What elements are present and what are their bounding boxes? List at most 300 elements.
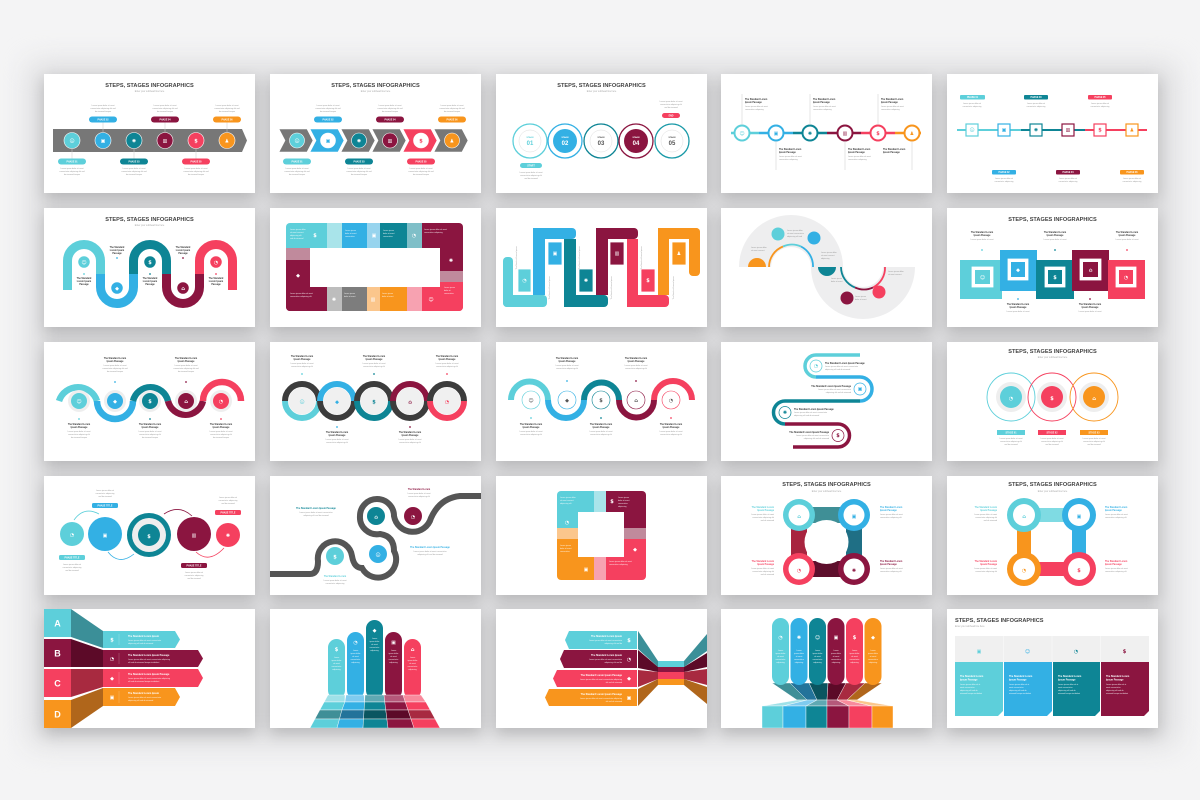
slide 20: four linked circles squared: The Standard Lorem	[1105, 560, 1127, 563]
slide 23: arrows converging: adipiscing elit sed do	[604, 642, 622, 645]
slide 19: four linked circles: Ipsum Passage	[757, 564, 775, 566]
slide 11: wave with circles: Lorem ipsum dolor sit amet	[104, 364, 127, 367]
slide 3: stage circles: STAGE	[632, 136, 640, 139]
slide 14: snake line: Lorem ipsum dolor sit amet consectetur	[794, 411, 827, 414]
slide 11: wave with circles	[44, 342, 255, 461]
slide 3: stage circles	[496, 74, 707, 193]
slide 16: phase circles with arrows: Lorem ipsum dolor sit	[63, 563, 82, 566]
slide 25: four column cards: Enter your subhead line here	[955, 625, 985, 628]
slide 19: four linked circles: Lorem ipsum dolor sit amet	[880, 513, 903, 516]
slide 21: ABCD ribbons: C	[54, 678, 61, 688]
slide 18: square tile frame: Lorem ipsum dolor sit amet	[609, 560, 632, 563]
slide 13: wave with outline circles: Ipsum Passage	[523, 427, 540, 429]
slide 18: square tile frame: adipiscing	[618, 506, 626, 508]
slide 8: serpentine bars: ◔	[522, 278, 527, 284]
slide 19: four linked circles: sed do eiusmod	[761, 574, 774, 576]
slide 20: four linked circles squared: consectetur adipiscing elit	[975, 570, 997, 573]
slide 1: phase arrow band: Lorem ipsum dolor sit amet	[154, 104, 177, 107]
slide 25: four column cards: $	[1123, 649, 1127, 655]
slide 22: pillars with stairs: Lorem	[334, 656, 340, 659]
slide 12: ring chain: The Standard Lorem	[399, 431, 421, 434]
slide 23: arrows converging: Lorem ipsum dolor sit amet consectetur	[589, 658, 622, 661]
slide 2: chevron phases: do eiusmod tempor	[351, 173, 367, 176]
slide 2: chevron phases: ☺	[294, 137, 300, 144]
slide 6: wave arches: ⌂	[181, 286, 185, 292]
slide 5: square phases: PHASE 01	[967, 96, 979, 99]
slide 3: stage circles: STAGE	[597, 136, 605, 139]
slide 22: pillars with stairs: ipsum dolor	[351, 652, 361, 655]
slide 25: four column cards: Lorem ipsum dolor sit at	[1106, 683, 1127, 686]
slide 23: arrows converging: The Standard Lorem Ipsum	[591, 654, 622, 657]
slide 23: arrows converging: $	[627, 638, 631, 644]
slide 5: square phases: PHASE 02	[998, 171, 1010, 174]
slide 24: six pillars funnel: consectetur	[813, 658, 823, 661]
slide 7: tile frame: ✺	[449, 258, 453, 264]
slide 10: stepped frames: Lorem ipsum dolor sit amet	[971, 238, 994, 241]
slide 2: chevron phases: STEPS, STAGES INFOGRAPHICS	[331, 83, 420, 89]
slide 6: wave arches	[44, 208, 255, 327]
slide 12: ring chain: Lorem ipsum dolor sit amet	[291, 362, 314, 365]
slide 5: square phases: Lorem ipsum dolor sit	[995, 177, 1014, 180]
slide 25: four column cards: eiusmod tempor incididunt	[1058, 692, 1081, 695]
slide 1: phase arrow band: Lorem ipsum dolor sit amet	[123, 167, 146, 170]
slide 24: six pillars funnel: consectetur	[831, 658, 841, 661]
slide 6: wave arches: The Standard	[143, 277, 158, 280]
slide 4: timeline circles: Ipsum Passage	[848, 152, 865, 154]
slide 12: ring chain: The Standard Lorem	[436, 355, 458, 358]
slide 6: wave arches: $	[148, 260, 152, 266]
slide 8: serpentine bars: ✺	[584, 278, 588, 284]
slide 24: six pillars funnel: ipsum dolor	[794, 652, 804, 655]
slide 4: timeline circles: The Standard Lorem	[745, 98, 767, 101]
slide 7: tile frame: sed do eiusmod	[290, 238, 303, 240]
slide 5: square phases: ✺	[1034, 128, 1038, 134]
slide 5: square phases: ☺	[969, 126, 975, 134]
slide 7: tile frame: dolor sit amet	[383, 232, 395, 235]
slide 4: timeline circles: $	[876, 131, 880, 137]
slide 15: three stage circles: $	[1050, 396, 1054, 402]
slide 7: tile frame: $	[313, 233, 317, 239]
slide 8: serpentine bars: The Standard Lorem Ipsum	[640, 246, 643, 270]
slide 15: three stage circles: sed do eiusmod	[1045, 444, 1059, 446]
slide 19: four linked circles: Ipsum Passage	[880, 564, 897, 566]
slide 20: four linked circles squared: Enter your subhead line here	[1038, 490, 1068, 493]
slide 1: phase arrow band: Lorem ipsum dolor sit amet	[185, 167, 208, 170]
slide 6: wave arches: Lorem Ipsum	[110, 250, 124, 252]
slide 9: S curve segments: sit amet consect	[888, 273, 902, 276]
slide 21: ABCD ribbons: ◆	[110, 676, 114, 682]
slide 11: wave with circles: consectetur adipiscing elit	[210, 433, 232, 436]
slide 14: snake line: The Standard Lorem Ipsum Passage	[789, 431, 830, 434]
slide 23: arrows converging: Lorem ipsum dolor sit amet consectetur	[589, 639, 622, 642]
slide 2: chevron phases: PHASE 05	[415, 160, 427, 163]
slide 24: six pillars funnel: ▣	[834, 635, 839, 641]
slide 23: arrows converging: Lorem ipsum dolor sit amet consectetur adipiscing	[580, 678, 622, 681]
slide 22: pillars with stairs: ▣	[391, 640, 396, 646]
slide 11: wave with circles: do eiusmod tempor	[142, 436, 158, 439]
slide 11: wave with circles: Lorem ipsum dolor sit amet	[210, 430, 233, 433]
slide 12: ring chain: Lorem ipsum dolor sit amet	[363, 362, 386, 365]
slide 5: square phases: ▣	[1002, 128, 1007, 134]
slide 5: square phases: Lorem ipsum dolor sit	[1059, 177, 1078, 180]
slide 17: road: Lorem ipsum dolor sit amet consectetur	[299, 511, 333, 514]
slide 13: wave with outline circles: Lorem ipsum dolor sit amet	[590, 430, 613, 433]
slide 10: stepped frames: Lorem ipsum dolor sit amet	[1079, 310, 1102, 313]
slide 19: four linked circles: The Standard Lorem	[880, 506, 902, 509]
slide 15: three stage circles: Enter your subhead line here	[1038, 356, 1068, 359]
slide 8: serpentine bars: The Standard Lorem Ipsum	[515, 246, 518, 270]
slide 4: timeline circles: Ipsum Passage	[883, 152, 900, 154]
slide 15: three stage circles: STEPS, STAGES INFOGRAPHICS	[1008, 349, 1097, 355]
slide 4: timeline circles: Ipsum Passage	[881, 102, 898, 104]
slide 24: six pillars funnel: adipiscing	[813, 662, 822, 664]
slide 1: phase arrow band: STEPS, STAGES INFOGRAPHICS	[105, 83, 194, 89]
slide 5: square phases: consectetur adipiscing	[1123, 180, 1141, 183]
slide 4: timeline circles: ☺	[739, 130, 745, 137]
slide 15: three stage circles: consectetur adipiscing elit	[1041, 440, 1063, 443]
slide 12: ring chain: Lorem ipsum dolor sit amet	[436, 362, 459, 365]
slide 12: ring chain: consectetur adipiscing elit	[363, 365, 385, 368]
slide 6: wave arches: The Standard	[110, 246, 125, 249]
slide 20: four linked circles squared: Ipsum Passage	[980, 564, 998, 566]
slide 21: ABCD ribbons: Lorem ipsum dolor sit amet consectetur adipiscing	[128, 677, 170, 680]
slide 24: six pillars funnel: consectetur	[868, 658, 878, 661]
slide 15: three stage circles: consectetur adipiscing elit	[1083, 440, 1105, 443]
slide 15: three stage circles: STAGE 02	[1047, 431, 1058, 434]
slide 16: phase circles with arrows: ▣	[103, 533, 108, 539]
slide 20: four linked circles squared: Ipsum Passage	[980, 510, 998, 512]
slide 9: S curve segments: adipiscing elit sed	[787, 235, 802, 238]
slide 24: six pillars funnel: ◆	[871, 635, 875, 641]
slide 19: four linked circles: sed do eiusmod	[761, 520, 774, 522]
slide 1: phase arrow band: ▣	[101, 138, 106, 144]
slide 18: square tile frame: Lorem ipsum dolor	[560, 496, 576, 499]
slide 5: square phases: Lorem ipsum dolor sit	[1091, 102, 1110, 105]
slide 25: four column cards: eiusmod tempor incididunt	[1106, 692, 1129, 695]
slide 6: wave arches: Passage	[79, 284, 89, 286]
slide 5: square phases: consectetur adipiscing	[995, 180, 1013, 183]
slide 4: timeline circles: ♟	[910, 131, 914, 137]
slide 20: four linked circles squared: Lorem ipsum dolor sit amet	[1105, 513, 1128, 516]
slide 13: wave with outline circles: consectetur adipiscing elit	[590, 433, 612, 436]
slide 2: chevron phases: do eiusmod tempor	[413, 173, 429, 176]
slide 25: four column cards: eiusmod tempor incididunt	[1009, 692, 1032, 695]
slide 7: tile frame	[270, 208, 481, 327]
slide 14: snake line: ▣	[858, 387, 863, 393]
slide 2: chevron phases	[270, 74, 481, 193]
slide 21: ABCD ribbons: The Standard Lorem Ipsum	[128, 692, 159, 695]
slide 1: phase arrow band: do eiusmod tempor	[157, 110, 173, 113]
slide 3: stage circles: END	[669, 115, 674, 117]
slide 12: ring chain: Ipsum Passage	[439, 359, 456, 361]
slide 24: six pillars funnel: Lorem	[833, 649, 839, 652]
slide 22: pillars with stairs: adipiscing	[332, 669, 341, 671]
slide 24: six pillars funnel: ✺	[797, 635, 801, 641]
slide 24: six pillars funnel: sit amet	[796, 655, 803, 658]
slide 7: tile frame: dolor sit amet	[344, 295, 356, 298]
slide 22: pillars with stairs: adipiscing	[408, 669, 417, 671]
slide 16: phase circles with arrows: consectetur adipiscing	[185, 574, 203, 577]
slide 23: arrows converging: ◔	[627, 657, 631, 663]
slide 8: serpentine bars: The Standard Lorem Ipsum	[610, 276, 613, 300]
slide 24: six pillars funnel: consectetur	[776, 658, 786, 661]
slide 4: timeline circles	[721, 74, 932, 193]
slide 16: phase circles with arrows: sed do eiusmod	[65, 570, 79, 572]
slide 11: wave with circles: Lorem ipsum dolor sit amet	[68, 430, 91, 433]
slide 4: timeline circles: Ipsum Passage	[813, 102, 830, 104]
slide 5: square phases: $	[1098, 128, 1102, 134]
slide 17: road: consectetur adipiscing elit	[408, 495, 430, 498]
slide 13: wave with outline circles: consectetur adipiscing elit	[556, 367, 578, 370]
slide 8: serpentine bars: $	[646, 278, 650, 284]
slide 13: wave with outline circles: ⌂	[634, 398, 638, 404]
slide 12: ring chain	[270, 342, 481, 461]
slide 16: phase circles with arrows: PHASE TITLE	[98, 504, 113, 507]
slide 18: square tile frame: consectetur	[618, 502, 628, 505]
slide 8: serpentine bars: ▣	[553, 251, 558, 257]
slide 21: ABCD ribbons: ◔	[110, 656, 114, 662]
slide 14: snake line: Lorem ipsum dolor sit amet consectetur	[818, 388, 851, 391]
slide 12: ring chain: The Standard Lorem	[291, 355, 313, 358]
slide 24: six pillars funnel: ipsum dolor	[813, 652, 823, 655]
slide 13: wave with outline circles: The Standard Lorem	[660, 423, 682, 426]
slide 7: tile frame: dolor sit	[444, 289, 451, 292]
slide 25: four column cards: Lorem ipsum dolor sit at	[1009, 683, 1030, 686]
slide 19: four linked circles: consectetur adipiscing elit	[880, 570, 902, 573]
slide 11: wave with circles: The Standard Lorem	[210, 423, 232, 426]
slide 11: wave with circles: do eiusmod tempor	[213, 436, 229, 439]
slide 6: wave arches: Lorem Ipsum	[143, 281, 157, 283]
slide 25: four column cards: adipiscing elit sed do	[960, 689, 978, 692]
slide 12: ring chain: ◆	[335, 400, 339, 406]
slide 7: tile frame: consectetur adipiscing elit	[290, 295, 312, 298]
slide 17: road: ☺	[375, 552, 381, 558]
slide 16: phase circles with arrows: sed do eiusmod	[98, 496, 112, 498]
slide 7: tile frame: consectetur	[383, 235, 393, 238]
slide 1: phase arrow band: consectetur adipiscing elit sed	[214, 107, 240, 110]
slide 7: tile frame: consectetur adipiscing	[424, 231, 443, 234]
slide 22: pillars with stairs: consectetur	[408, 665, 418, 668]
slide 22: pillars with stairs: consectetur	[389, 658, 399, 661]
slide 2: chevron phases: consectetur adipiscing elit sed	[377, 107, 403, 110]
slide 18: square tile frame: consectetur adipiscing	[609, 563, 628, 566]
slide 12: ring chain: ⌂	[408, 400, 412, 406]
slide 17: road: adipiscing elit sed do eiusmod	[417, 553, 443, 556]
slide 22: pillars with stairs: consectetur	[332, 665, 342, 668]
slide 1: phase arrow band: ♟	[225, 138, 229, 144]
slide 16: phase circles with arrows: ▥	[192, 533, 197, 539]
slide 6: wave arches: ◆	[115, 286, 119, 292]
slide 16: phase circles with arrows: $	[147, 534, 151, 540]
slide 13: wave with outline circles: consectetur adipiscing elit	[625, 367, 647, 370]
slide 2: chevron phases: Lorem ipsum dolor sit amet	[441, 104, 464, 107]
slide 21: ABCD ribbons: B	[54, 648, 61, 658]
slide 2: chevron phases: Lorem ipsum dolor sit amet	[317, 104, 340, 107]
slide 19: four linked circles: Lorem ipsum dolor sit amet	[751, 567, 774, 570]
slide 11: wave with circles: Lorem ipsum dolor sit amet	[175, 364, 198, 367]
slide 7: tile frame: consectetur	[444, 292, 454, 295]
slide 1: phase arrow band: Lorem ipsum dolor sit amet	[216, 104, 239, 107]
slide 16: phase circles with arrows: PHASE TITLE	[221, 511, 236, 514]
slide 12: ring chain: The Standard Lorem	[363, 355, 385, 358]
slide 14: snake line: Lorem ipsum dolor sit amet consectetur	[796, 434, 829, 437]
slide 24: six pillars funnel: ipsum dolor	[776, 652, 786, 655]
slide 7: tile frame: ✺	[332, 297, 336, 303]
slide 20: four linked circles squared: The Standard Lorem	[1105, 506, 1127, 509]
slide 15: three stage circles: STAGE 01	[1006, 431, 1017, 434]
slide 22: pillars with stairs: Lorem	[410, 656, 416, 659]
slide 17: road: consectetur adipiscing	[326, 582, 344, 585]
slide 1: phase arrow band: ▥	[163, 138, 168, 144]
slide 5: square phases: ▥	[1066, 128, 1071, 134]
slide 24: six pillars funnel: sit amet	[814, 655, 821, 658]
slide 24: six pillars funnel: Lorem	[778, 649, 784, 652]
slide 25: four column cards: Ipsum Passage	[1009, 678, 1027, 682]
slide 5: square phases: consectetur adipiscing	[1027, 105, 1045, 108]
slide 4: timeline circles: Ipsum Passage	[779, 152, 796, 154]
slide 23: arrows converging: elit sed do eiusmod	[606, 681, 622, 684]
slide 16: phase circles with arrows: ✺	[226, 533, 230, 539]
slide 23: arrows converging	[496, 609, 707, 728]
slide 7: tile frame: consectetur	[345, 235, 355, 238]
slide 13: wave with outline circles: consectetur adipiscing elit	[660, 433, 682, 436]
slide 12: ring chain: Lorem ipsum dolor sit amet	[326, 438, 349, 441]
slide 5: square phases: Lorem ipsum dolor sit	[1123, 177, 1142, 180]
slide 8: serpentine bars: ♟	[677, 251, 681, 257]
slide 22: pillars with stairs: $	[335, 647, 339, 653]
slide 21: ABCD ribbons: The Standard Lorem Ipsum Passage	[128, 673, 170, 676]
slide 13: wave with outline circles: Ipsum Passage	[559, 361, 576, 363]
slide 21: ABCD ribbons: elit sed do eiusmod tempor incididunt	[128, 661, 160, 664]
slide 11: wave with circles: $	[148, 399, 152, 405]
slide 11: wave with circles: consectetur adipiscing elit sed	[173, 367, 199, 370]
slide 2: chevron phases: consectetur adipiscing elit sed	[346, 170, 372, 173]
slide 24: six pillars funnel: ipsum dolor	[868, 652, 878, 655]
slide 11: wave with circles: do eiusmod tempor	[107, 370, 123, 373]
slide 5: square phases: Lorem ipsum dolor sit	[963, 102, 982, 105]
slide 24: six pillars funnel: consectetur	[794, 658, 804, 661]
slide 6: wave arches: ◔	[214, 260, 218, 266]
slide 1: phase arrow band: do eiusmod tempor	[95, 110, 111, 113]
slide 1: phase arrow band: do eiusmod tempor	[126, 173, 142, 176]
slide 25: four column cards: The Standard Lorem	[1106, 675, 1129, 678]
slide 22: pillars with stairs: sit amet	[371, 643, 378, 646]
slide 17: road: ◔	[411, 514, 415, 520]
slide 7: tile frame: dolor sit amet	[382, 295, 394, 298]
slide 24: six pillars funnel: sit amet	[777, 655, 784, 658]
slide 10: stepped frames: Lorem ipsum dolor sit amet	[1007, 310, 1030, 313]
slide 2: chevron phases: ♟	[450, 138, 454, 144]
slide 9: S curve segments: Lorem ipsum dolor	[821, 251, 837, 254]
slide 7: tile frame: dolor sit amet	[345, 232, 357, 235]
slide 24: six pillars funnel: ◔	[778, 635, 783, 641]
slide 9: S curve segments: sit amet consect	[751, 249, 765, 252]
slide 25: four column cards: ☺	[1025, 648, 1030, 655]
slide 5: square phases: consectetur adipiscing	[963, 105, 981, 108]
slide 22: pillars with stairs: ◔	[353, 640, 358, 646]
slide 1: phase arrow band: ✺	[132, 138, 136, 144]
slide 3: stage circles: Lorem ipsum dolor sit amet	[520, 171, 543, 174]
slide 12: ring chain: ◔	[445, 400, 449, 406]
slide 7: tile frame: ▥	[371, 297, 376, 303]
slide 13: wave with outline circles: ◔	[669, 398, 673, 404]
slide 20: four linked circles squared: consectetur adipiscing elit	[975, 516, 997, 519]
slide 20: four linked circles squared: sed do eiusmod	[984, 520, 997, 522]
slide 25: four column cards: The Standard Lorem	[960, 675, 983, 678]
slide 3: stage circles: START	[527, 164, 535, 167]
slide 21: ABCD ribbons: ▣	[110, 695, 115, 701]
slide 10: stepped frames: The Standard Lorem	[1044, 231, 1066, 234]
slide 13: wave with outline circles: The Standard Lorem	[590, 423, 612, 426]
slide 14: snake line: adipiscing elit sed do eiusmod	[804, 437, 829, 440]
slide 18: square tile frame: ◆	[633, 547, 637, 553]
slide 12: ring chain: $	[372, 400, 376, 406]
slide 18: square tile frame: ◔	[565, 520, 569, 526]
slide 4: timeline circles: consectetur adipiscing	[745, 108, 764, 111]
slide 13: wave with outline circles: Lorem ipsum dolor sit amet	[660, 430, 683, 433]
slide 9: S curve segments: sit amet consectetur	[787, 232, 804, 235]
slide 11: wave with circles: ◔	[219, 399, 223, 405]
slide 4: timeline circles: The Standard Lorem	[779, 148, 801, 151]
slide 11: wave with circles: The Standard Lorem	[175, 357, 197, 360]
slide 4: timeline circles: The Standard Lorem	[813, 98, 835, 101]
slide 9: S curve segments: dolor sit amet	[831, 280, 843, 283]
slide 5: square phases: ♟	[1130, 128, 1134, 134]
slide 13: wave with outline circles: consectetur adipiscing elit	[520, 433, 542, 436]
slide 6: wave arches: The Standard	[77, 277, 92, 280]
slide 1: phase arrow band: Lorem ipsum dolor sit amet	[61, 167, 84, 170]
slide 10: stepped frames: Ipsum Passage	[1047, 235, 1064, 237]
slide 14: snake line	[721, 342, 932, 461]
slide 15: three stage circles: sed do eiusmod	[1087, 444, 1101, 446]
slide 19: four linked circles: consectetur adipiscing elit	[880, 516, 902, 519]
slide 9: S curve segments: Lorem ipsum	[831, 277, 842, 280]
slide 25: four column cards: STEPS, STAGES INFOGRAPHICS	[955, 618, 1044, 624]
slide 22: pillars with stairs: adipiscing	[370, 650, 379, 652]
slide 24: six pillars funnel: Lorem	[852, 649, 858, 652]
slide 11: wave with circles: Ipsum Passage	[213, 427, 230, 429]
slide 25: four column cards: The Standard Lorem	[1058, 675, 1081, 678]
slide 25: four column cards	[947, 609, 1158, 728]
slide 24: six pillars funnel: sit amet	[833, 655, 840, 658]
slide 10: stepped frames: ⌂	[1089, 268, 1093, 274]
slide 7: tile frame: Lorem ipsum dolor	[290, 228, 306, 231]
slide 7: tile frame: ◆	[296, 273, 300, 279]
slide 3: stage circles: STAGE	[526, 136, 534, 139]
slide 25: four column cards: adipiscing elit sed do	[1058, 689, 1076, 692]
slide 13: wave with outline circles: Lorem ipsum dolor sit amet	[520, 430, 543, 433]
slide 8: serpentine bars: The Standard Lorem Ipsum	[672, 276, 675, 300]
slide 13: wave with outline circles: $	[599, 398, 603, 404]
slide 2: chevron phases: Enter your subhead line here	[361, 90, 391, 93]
slide 25: four column cards: Lorem ipsum dolor sit at	[1058, 683, 1079, 686]
slide 10: stepped frames: STEPS, STAGES INFOGRAPHICS	[1008, 217, 1097, 223]
slide 12: ring chain: Ipsum Passage	[366, 359, 383, 361]
slide 8: serpentine bars	[496, 208, 707, 327]
slide 22: pillars with stairs: Lorem	[353, 649, 359, 652]
slide 21: ABCD ribbons: Lorem ipsum dolor sit amet consectetur	[128, 639, 161, 642]
slide 19: four linked circles: Enter your subhead line here	[812, 490, 842, 493]
slide 6: wave arches: The Standard	[209, 277, 224, 280]
slide 20: four linked circles squared: ◔	[1022, 568, 1026, 574]
slide 11: wave with circles: Ipsum Passage	[142, 427, 159, 429]
slide 24: six pillars funnel: sit amet	[870, 655, 877, 658]
slide 16: phase circles with arrows: consectetur adipiscing	[219, 499, 237, 502]
slide 4: timeline circles: Lorem ipsum dolor sit amet	[848, 155, 871, 158]
slide 9: S curve segments: Lorem ipsum dolor	[751, 246, 767, 249]
slide 16: phase circles with arrows: Lorem ipsum dolor sit	[185, 571, 204, 574]
slide 24: six pillars funnel: $	[853, 635, 857, 641]
